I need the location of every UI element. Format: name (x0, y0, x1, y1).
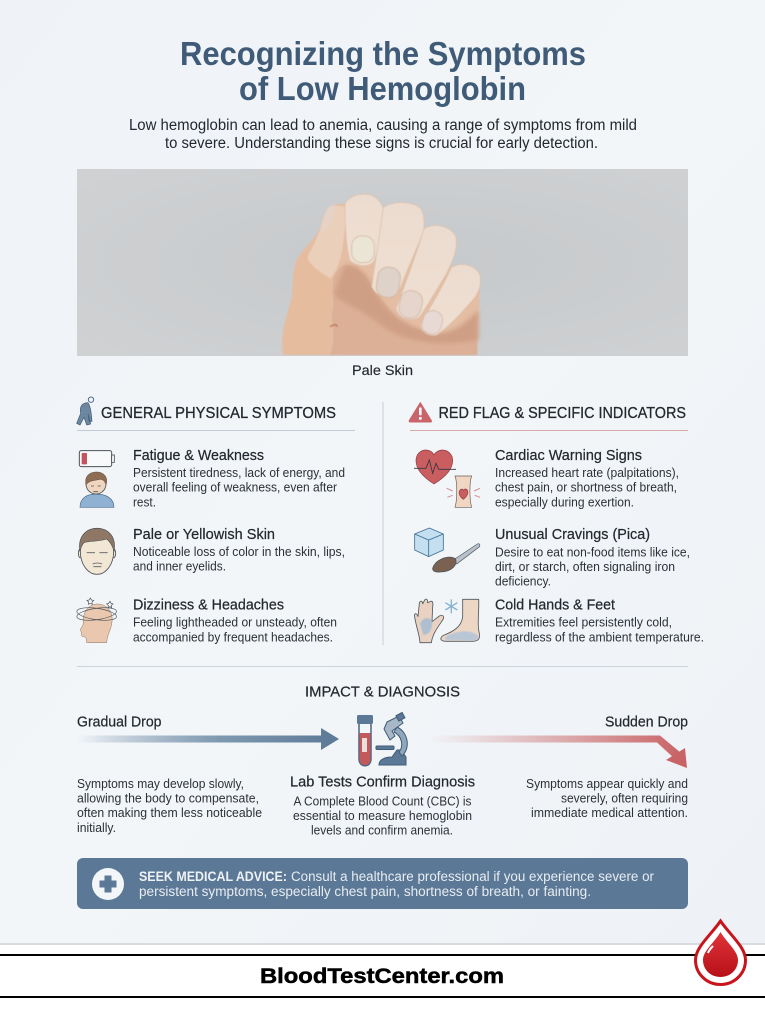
item description (495, 465, 679, 510)
title: of Low Hemoglobin (239, 70, 526, 107)
description: Symptoms may develop slowly, (77, 776, 244, 791)
description: initially. (77, 820, 116, 835)
item: cardiac warning signs (414, 447, 679, 510)
item: pale or yellowish skin (78, 526, 345, 574)
item title: Cold Hands & Feet (495, 596, 616, 613)
footer site name: BloodTestCenter.com (260, 965, 504, 988)
icon: ice cube and spoon of dirt (415, 528, 480, 572)
description: levels and confirm anemia. (311, 822, 453, 838)
intro text (129, 117, 637, 152)
icon: microscope (376, 712, 407, 765)
item description: especially during exertion. (495, 494, 634, 510)
description (77, 776, 262, 835)
callout text: persistent symptoms, especially chest pain, shortness of breath, or fainting. (139, 884, 591, 899)
sudden drop column (429, 714, 688, 820)
callout text: SEEK MEDICAL ADVICE: (139, 869, 287, 884)
item description: rest. (133, 494, 156, 510)
heading: Lab Tests Confirm Diagnosis (290, 774, 475, 791)
item description: regardless of the ambient temperature. (495, 630, 704, 645)
description: A Complete Blood Count (CBC) is (294, 794, 472, 808)
item title: Cardiac Warning Signs (495, 447, 642, 464)
item description (495, 544, 690, 589)
description: essential to measure hemoglobin (293, 808, 472, 823)
item: cold hands and feet (415, 596, 704, 645)
icon: medical cross (92, 868, 124, 900)
description (293, 794, 472, 838)
icon: warning triangle (409, 403, 432, 422)
icon: heart with pulse and chest (414, 450, 480, 507)
item description: Increased heart rate (palpitations), (495, 465, 679, 480)
lab tests column (290, 712, 475, 838)
label: Gradual Drop (77, 714, 162, 730)
item title: Dizziness & Headaches (133, 596, 284, 613)
item description: deficiency. (495, 574, 551, 589)
icon: hunched walking figure (77, 397, 94, 425)
icon: cold hand, snowflake and foot (415, 599, 480, 643)
item description (133, 615, 337, 645)
icon: pale face (78, 528, 116, 574)
panel: general physical symptoms (76, 397, 355, 645)
item title: Unusual Cravings (Pica) (495, 526, 650, 543)
panel: red flag and specific indicators (409, 403, 704, 645)
item description: Persistent tiredness, lack of energy, and (133, 465, 345, 480)
icon: test tube (357, 715, 373, 766)
panel: impact and diagnosis (77, 684, 688, 838)
item description (133, 465, 345, 510)
photo caption: Pale Skin (352, 362, 413, 378)
arrow: gradual decline (77, 728, 339, 750)
item: unusual cravings (415, 526, 690, 589)
photo: pale hand and nails (77, 169, 688, 356)
item description: Desire to eat non-food items like ice, (495, 544, 690, 560)
item description: overall feeling of weakness, even after (133, 480, 338, 495)
heading: GENERAL PHYSICAL SYMPTOMS (101, 405, 336, 422)
icon: dizzy head (76, 598, 117, 643)
description: immediate medical attention. (531, 805, 688, 820)
description: severely, often requiring (561, 790, 688, 806)
logo: blood drop (696, 921, 746, 984)
description (526, 776, 688, 820)
icon: low battery and tired person (79, 451, 114, 507)
description: Symptoms appear quickly and (526, 776, 688, 791)
title (180, 35, 586, 107)
item description: Feeling lightheaded or unsteady, often (133, 615, 337, 630)
callout: seek medical advice (77, 858, 688, 909)
intro text: Low hemoglobin can lead to anemia, causing a range of symptoms from mild (129, 117, 637, 134)
title: Recognizing the Symptoms (180, 35, 586, 72)
arrow: sudden decline (429, 736, 687, 768)
item: dizziness and headaches (76, 596, 337, 645)
callout text (139, 869, 654, 899)
description: often making them less noticeable (77, 805, 262, 820)
item description: chest pain, or shortness of breath, (495, 480, 677, 495)
heading: RED FLAG & SPECIFIC INDICATORS (438, 405, 686, 422)
item description: accompanied by frequent headaches. (133, 630, 333, 645)
item description (495, 615, 704, 645)
item title: Pale or Yellowish Skin (133, 526, 275, 543)
label: Sudden Drop (605, 714, 688, 730)
heading: IMPACT & DIAGNOSIS (305, 684, 460, 701)
item description: Extremities feel persistently cold, (495, 615, 672, 630)
item description (133, 544, 345, 574)
item: fatigue and weakness (79, 447, 345, 510)
intro text: to severe. Understanding these signs is crucial for early detection. (165, 135, 598, 152)
item description: dirt, or starch, often signaling iron (495, 559, 675, 574)
callout text: Consult a healthcare professional if you experience severe or (291, 869, 654, 884)
item description: Noticeable loss of color in the skin, lips, (133, 544, 345, 559)
item title: Fatigue & Weakness (133, 447, 264, 464)
description: allowing the body to compensate, (77, 790, 259, 806)
gradual drop column (77, 714, 339, 835)
item description: and inner eyelids. (133, 559, 226, 574)
